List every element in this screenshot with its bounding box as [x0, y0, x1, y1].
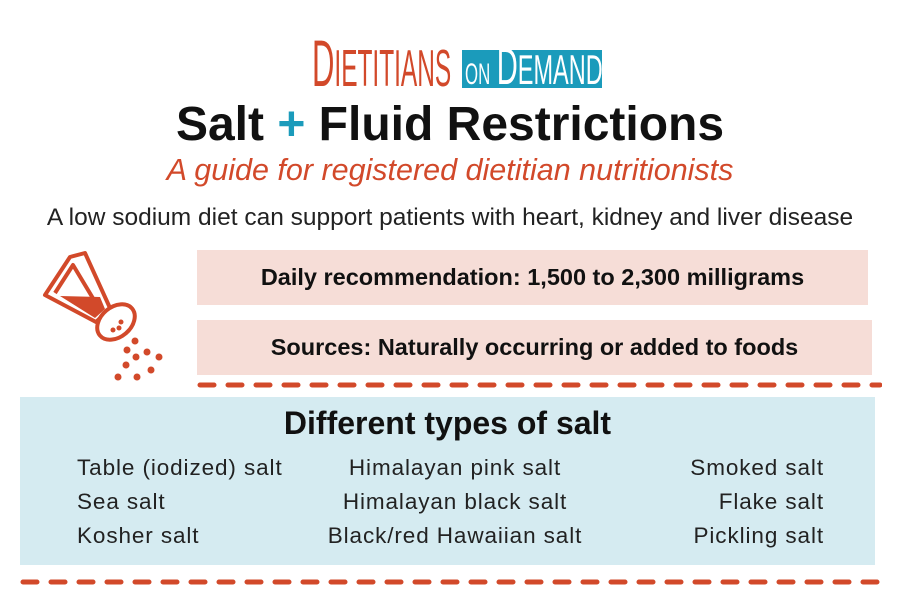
column 1: Sea salt: [77, 489, 166, 514]
column 2: [328, 455, 582, 548]
logo: dietitians: DIETITIANS: [312, 26, 451, 100]
panel: daily recommendation: [197, 250, 868, 305]
column 2: Himalayan black salt: [343, 489, 567, 514]
subtitle: A guide for registered dietitian nutritionists: [167, 153, 733, 187]
column 1: Kosher salt: [77, 523, 199, 548]
panel: daily recommendation: Daily recommendation: 1,500 to 2,300 milligrams: [261, 264, 804, 290]
title: Salt + Fluid Restrictions: [176, 98, 724, 151]
logo: [312, 26, 602, 100]
column 1: Table (iodized) salt: [77, 455, 283, 480]
column 2: Black/red Hawaiian salt: [328, 523, 582, 548]
column 1: [77, 455, 283, 548]
column 3: Smoked salt: [690, 455, 824, 480]
heading: types: Different types of salt: [284, 405, 611, 441]
intro text: A low sodium diet can support patients with heart, kidney and liver disease: [47, 204, 853, 231]
column 3: [690, 455, 824, 548]
panel: sources: [197, 320, 872, 375]
column 3: Flake salt: [719, 489, 824, 514]
panel: types of salt: [20, 397, 875, 565]
panel: sources: Sources: Naturally occurring or added to foods: [271, 334, 798, 360]
column 2: Himalayan pink salt: [349, 455, 561, 480]
column 3: Pickling salt: [694, 523, 824, 548]
icon: salt shaker: [42, 251, 162, 380]
